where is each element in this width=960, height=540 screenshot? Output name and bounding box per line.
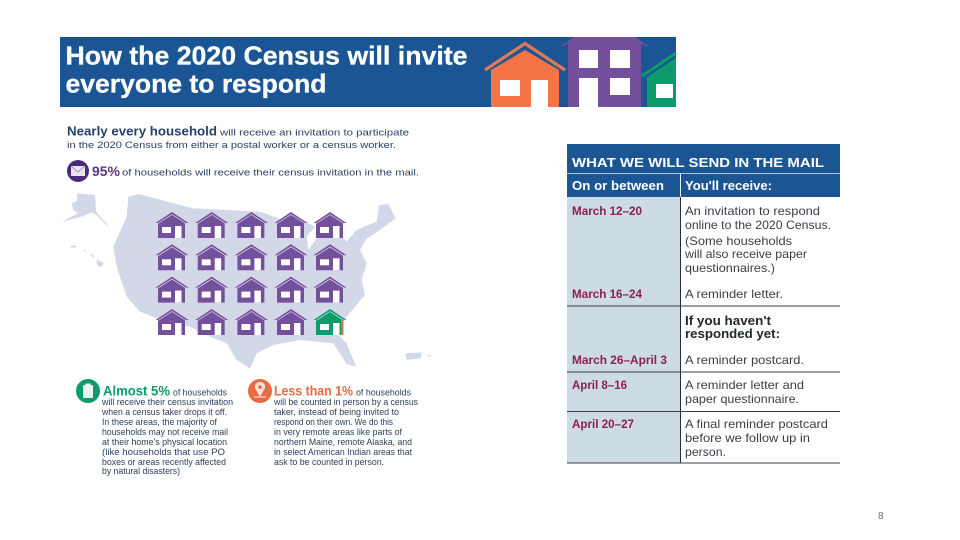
table title: WHAT WE WILL SEND IN THE MAIL: [572, 156, 824, 170]
row: March 12-20: online to the 2020 Census.: [685, 218, 831, 232]
row: March 26-April 3: March 26–April 3: [572, 355, 667, 367]
follow-up heading: responded yet:: [685, 327, 780, 341]
row: March 26-April 3: [572, 353, 804, 367]
intro text: Nearly every household: [67, 124, 217, 138]
callout: less than 1 percent: in very remote areas like parts of: [274, 426, 402, 437]
row: March 12-20: will also receive paper: [684, 247, 807, 261]
callout: less than 1 percent: [248, 379, 418, 467]
icon: green and orange house: [314, 309, 346, 335]
callout: almost 5 percent: will receive their census invitation: [101, 396, 233, 407]
callout: almost 5 percent: [76, 379, 233, 476]
icon: green house: [642, 53, 676, 107]
header banner: [60, 37, 676, 107]
follow-up heading: If you haven't: [685, 314, 772, 328]
mail schedule table: [567, 144, 840, 463]
callout: almost 5 percent: by natural disasters): [102, 465, 180, 476]
callout: less than 1 percent: taker, instead of being invited to: [274, 406, 399, 417]
house grid pictogram: [156, 212, 346, 335]
icon: mail envelope: [67, 160, 89, 182]
intro text: will receive an invitation to participate: [219, 126, 409, 138]
row: April 8-16: [572, 378, 804, 406]
row: March 26-April 3: A reminder postcard.: [685, 353, 804, 367]
mail statistic: 95%: [92, 164, 120, 179]
Hawaii: [70, 245, 104, 267]
icon: location pin: [248, 379, 272, 403]
icon: purple house: [561, 37, 648, 107]
row: March 12-20: [572, 204, 831, 275]
row: March 16-24: [572, 287, 783, 301]
column headings: [572, 179, 772, 193]
title: [66, 40, 468, 98]
row: March 16-24: A reminder letter.: [685, 287, 783, 301]
callout: less than 1 percent: northern Maine, remote Alaska, and: [274, 436, 412, 447]
row: April 8-16: April 8–16: [572, 380, 627, 392]
callout: less than 1 percent: of households: [356, 386, 411, 398]
callout: less than 1 percent: Less than 1%: [274, 382, 353, 398]
row: March 12-20: An invitation to respond: [685, 204, 820, 218]
callout: almost 5 percent: In these areas, the majority of: [102, 416, 217, 427]
row: March 12-20: March 12–20: [572, 206, 642, 218]
contiguous states: [113, 194, 396, 368]
intro text: [67, 124, 409, 150]
icon: orange house: [485, 44, 565, 107]
row: March 12-20: questionnaires.): [685, 261, 775, 275]
column headings: On or between: [572, 179, 664, 193]
follow-up heading: [685, 314, 780, 341]
row: April 20-27: before we follow up in: [685, 431, 810, 445]
callout: less than 1 percent: ask to be counted in person.: [274, 456, 384, 467]
row: April 20-27: person.: [685, 445, 726, 459]
mail statistic: [92, 164, 419, 179]
column headings: You'll receive:: [685, 179, 772, 193]
row: April 20-27: April 20–27: [572, 419, 634, 431]
callout: almost 5 percent: Almost 5%: [103, 382, 171, 398]
Puerto Rico: [405, 352, 431, 360]
intro text: in the 2020 Census from either a postal worker or a census worker.: [67, 139, 396, 150]
row: March 16-24: March 16–24: [572, 289, 643, 301]
row: April 20-27: [572, 417, 828, 459]
callout: less than 1 percent: will be counted in person by a census: [273, 396, 418, 407]
row: March 12-20: (Some households: [685, 234, 792, 248]
map of the United States: [62, 193, 431, 368]
row: April 20-27: A final reminder postcard: [685, 417, 828, 431]
icon: clipboard: [76, 379, 100, 403]
page number: 8: [878, 511, 884, 522]
title: How the 2020 Census will invite: [66, 40, 468, 70]
callout: almost 5 percent: (like households that use PO: [102, 446, 225, 457]
Alaska: [62, 193, 109, 227]
row: April 8-16: A reminder letter and: [685, 378, 804, 392]
callout: almost 5 percent: at their home's physical location: [102, 436, 227, 447]
callout: almost 5 percent: when a census taker drops it off.: [101, 406, 227, 417]
callout: almost 5 percent: of households: [173, 386, 227, 398]
callout: less than 1 percent: respond on their own. We do this: [274, 416, 393, 427]
callout: almost 5 percent: boxes or areas recently affected: [102, 456, 226, 467]
title: everyone to respond: [66, 68, 326, 98]
callout: almost 5 percent: households may not receive mail: [102, 426, 228, 437]
mail statistic: of households will receive their census invitation in the mail.: [122, 166, 419, 178]
row: April 8-16: paper questionnaire.: [685, 392, 799, 406]
callout: less than 1 percent: in select American Indian areas that: [274, 446, 412, 457]
